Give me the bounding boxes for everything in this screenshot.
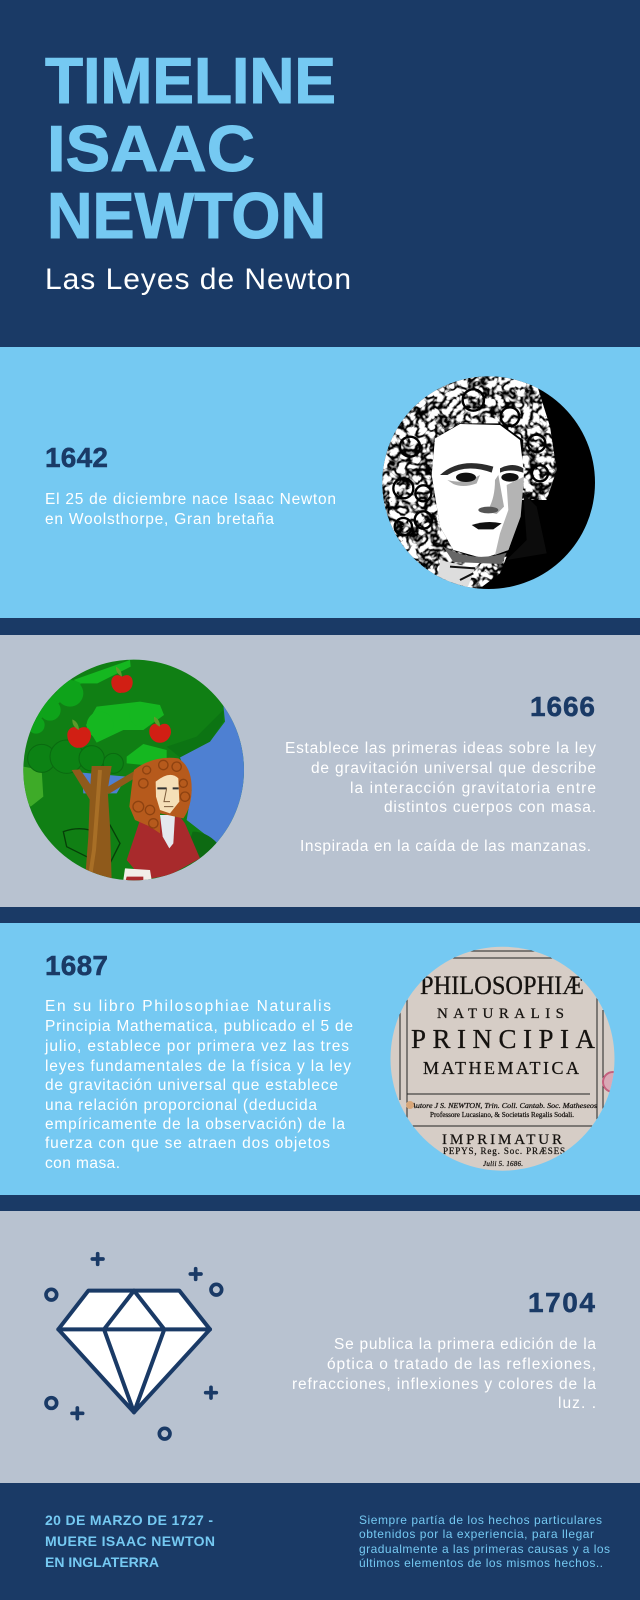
image: Principia title page <box>390 946 623 1172</box>
image: Principia title page: Professore Lucasiano, & Societatis Regalis Sodali. <box>430 1110 574 1119</box>
text block 1666: la interacción gravitatoria entre <box>350 780 596 797</box>
panel: 1666 <box>0 635 640 907</box>
year 1687: 1687 <box>45 950 108 981</box>
text block 1642 <box>45 491 336 528</box>
icon: diamond with sparkles <box>46 1254 222 1439</box>
text block 1687: En su libro Philosophiae Naturalis <box>45 998 331 1015</box>
text block 1687: de gravitación universal que establece <box>45 1077 338 1094</box>
subtitle: Las Leyes de Newton <box>45 263 351 296</box>
footer: death note: 20 DE MARZO DE 1727 - <box>45 1512 213 1528</box>
footer: death note: MUERE ISAAC NEWTON <box>45 1533 215 1549</box>
image: Principia title page: NATURALIS <box>437 1006 564 1022</box>
text block 1642: en Woolsthorpe, Gran bretaña <box>45 511 274 528</box>
image: Principia title page: MATHEMATICA <box>423 1058 579 1078</box>
footer: death note <box>45 1512 215 1570</box>
title <box>45 44 336 252</box>
header panel <box>0 0 640 347</box>
text block 1687: una relación proporcional (deducida <box>45 1097 317 1114</box>
text block 1666: Inspirada en la caída de las manzanas. <box>300 838 591 855</box>
text block 1704: luz. . <box>558 1395 596 1412</box>
text block 1687: julio, establece por primera vez las tres <box>44 1038 349 1055</box>
footer: quote: últimos elementos de los mismos hechos.. <box>359 1556 603 1570</box>
panel: 1687 <box>0 923 640 1195</box>
image: Principia title page: PHILOSOPHIÆ <box>420 971 584 1000</box>
image: Newton engraving portrait <box>380 373 600 593</box>
text block 1704 <box>292 1336 596 1412</box>
footer: death note: EN INGLATERRA <box>45 1554 159 1570</box>
panel: 1642 <box>0 347 640 618</box>
panel: 1704 <box>0 1211 640 1483</box>
text block 1687: empíricamente de la observación) de la <box>45 1116 345 1133</box>
text block 1704: óptica o tratado de las reflexiones, <box>327 1356 596 1373</box>
year 1642: 1642 <box>45 442 108 473</box>
text block 1687: con masa. <box>45 1155 120 1172</box>
footer: quote: gradualmente a las primeras causas y a los <box>359 1542 610 1556</box>
year 1704: 1704 <box>528 1287 595 1318</box>
year 1666: 1666 <box>530 691 595 722</box>
image: Principia title page: Julii 5. 1686. <box>483 1160 523 1168</box>
footer: quote <box>359 1513 610 1570</box>
footer: quote: obtenidos por la experiencia, para llegar <box>359 1527 594 1541</box>
footer panel <box>0 1483 640 1600</box>
text block 1666: de gravitación universal que describe <box>311 760 596 777</box>
text block 1666 <box>285 740 596 855</box>
text block 1687: leyes fundamentales de la física y la ley <box>45 1058 351 1075</box>
text block 1642: El 25 de diciembre nace Isaac Newton <box>45 491 336 508</box>
image: Principia title page: PRINCIPIA <box>411 1024 596 1054</box>
image: Principia title page: IMPRIMATUR <box>442 1132 562 1148</box>
text block 1687: fuerza con que se atraen dos objetos <box>45 1135 330 1152</box>
text block 1687 <box>44 998 353 1172</box>
title: TIMELINE <box>45 44 336 117</box>
title: NEWTON <box>47 179 326 252</box>
text block 1704: Se publica la primera edición de la <box>334 1336 596 1353</box>
title: ISAAC <box>47 112 255 185</box>
text block 1704: refracciones, inflexiones y colores de la <box>292 1376 596 1393</box>
text block 1666: distintos cuerpos con masa. <box>384 799 596 816</box>
footer: quote: Siempre partía de los hechos particulares <box>359 1513 602 1527</box>
Newton figure <box>123 758 200 883</box>
image: Principia title page: PEPYS, Reg. Soc. PRÆSES <box>443 1146 565 1156</box>
image: Newton under apple tree <box>20 657 250 887</box>
text block 1666: Establece las primeras ideas sobre la ley <box>285 740 596 757</box>
image: Principia title page: Autore J S. NEWTON, Trin. Coll. Cantab. Soc. Matheseos <box>410 1101 597 1110</box>
text block 1687: Principia Mathematica, publicado el 5 de <box>45 1018 353 1035</box>
